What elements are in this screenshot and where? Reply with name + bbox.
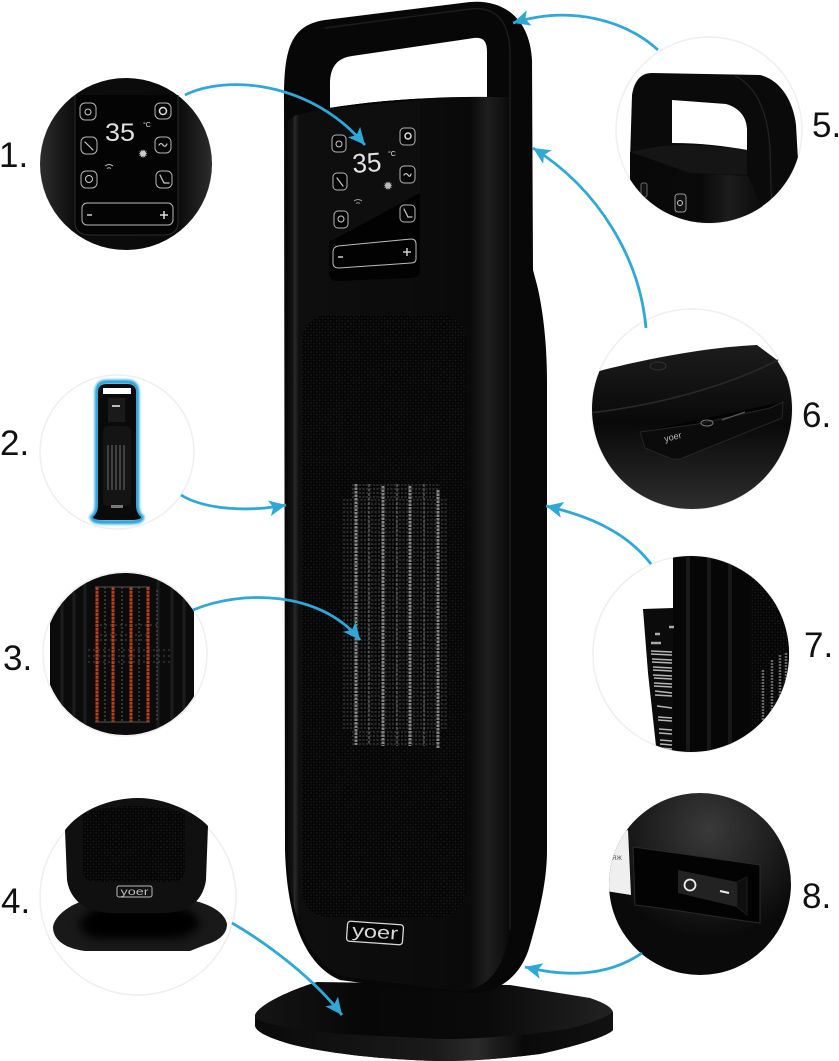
small vents [651, 627, 674, 643]
arrow 8 [525, 953, 642, 973]
wifi icon [354, 200, 362, 204]
lower body [630, 152, 762, 223]
element glimpses [763, 653, 786, 720]
handle highlight [735, 76, 772, 200]
panel glass [329, 99, 420, 281]
body fragment [65, 798, 208, 913]
circle 4: base detail: yoer [120, 887, 149, 898]
remote button [701, 420, 713, 426]
logo [117, 886, 152, 897]
vents [651, 651, 672, 749]
circle 4: base detail [40, 798, 236, 995]
temperature display: 35 [351, 147, 382, 179]
frame [95, 587, 150, 722]
rocker switch [678, 870, 737, 907]
heater base [255, 982, 613, 1061]
circle 3: glowing heating element [43, 570, 207, 740]
celsius: °C [143, 121, 151, 129]
central dots [88, 625, 170, 662]
buttons [80, 103, 172, 188]
circle 1: control panel detail [40, 78, 212, 250]
handle [630, 73, 802, 230]
handle rim highlight [325, 9, 510, 930]
mini handle opening [103, 388, 131, 394]
front body [288, 97, 510, 991]
base [53, 900, 227, 951]
dark background [50, 570, 194, 740]
grille [302, 315, 466, 917]
remote [640, 402, 783, 459]
mini grille [103, 426, 131, 506]
sun: ✹ [138, 147, 148, 161]
arrow 6 [533, 148, 646, 328]
slider plus [403, 248, 411, 256]
housing [592, 345, 792, 509]
mesh edge [750, 576, 789, 732]
heater body silhouette [284, 2, 547, 993]
wifi [105, 164, 113, 168]
circle 5: handle detail [616, 37, 802, 230]
circle 7: side vents [592, 556, 790, 752]
logo [346, 920, 404, 945]
temperature slider [333, 239, 416, 268]
plus [160, 211, 168, 219]
remote slider [722, 412, 745, 420]
mini panel [108, 398, 125, 422]
grille fragment [83, 806, 185, 882]
handle opening [330, 38, 487, 108]
recess [633, 847, 760, 923]
circle 2: illuminated outline [40, 375, 194, 529]
panel outline [75, 95, 178, 235]
number 2: 2. [0, 424, 29, 463]
mini logo [111, 505, 123, 508]
mini element [108, 445, 124, 490]
mini heater [93, 384, 141, 520]
circle 8: power switch [600, 793, 791, 975]
on symbol [720, 891, 729, 893]
off symbol [684, 880, 696, 890]
sun icon: ✹ [383, 179, 393, 193]
orange filaments [97, 587, 148, 722]
label sticker [609, 830, 631, 895]
top face [630, 145, 747, 175]
lid edge [590, 360, 778, 413]
number 6: 6. [802, 396, 831, 435]
arrow 3 [193, 598, 360, 640]
slot [654, 403, 779, 430]
pale filaments [105, 587, 157, 722]
arrow 1 [185, 85, 365, 145]
minus [87, 214, 92, 216]
side body [673, 556, 789, 752]
arrow 4 [232, 923, 342, 1015]
blue glow [92, 382, 142, 522]
number 8: 8. [802, 877, 831, 916]
logo: yoer [351, 920, 399, 944]
number 7: 7. [804, 626, 833, 665]
button [675, 194, 686, 212]
panel buttons [332, 128, 415, 228]
arrow 7 [546, 506, 651, 564]
arrow 2 [181, 495, 286, 509]
small button [641, 183, 647, 197]
vent panel [643, 608, 673, 755]
number 4: 4. [1, 882, 30, 921]
remote logo: yoer [663, 430, 682, 444]
slider minus [338, 256, 343, 258]
slider [82, 203, 173, 225]
heater main product [255, 2, 613, 1061]
heating element [343, 484, 447, 748]
circle 6: remote in slot [592, 308, 792, 510]
control panel [329, 99, 420, 281]
temperature: 35 [105, 119, 135, 147]
label text: ЯЖ [612, 856, 622, 862]
top button ring [650, 362, 666, 370]
number 3: 3. [3, 639, 32, 678]
celsius label: °C [388, 150, 396, 158]
opening [672, 100, 747, 150]
arrow 5 [513, 15, 658, 50]
